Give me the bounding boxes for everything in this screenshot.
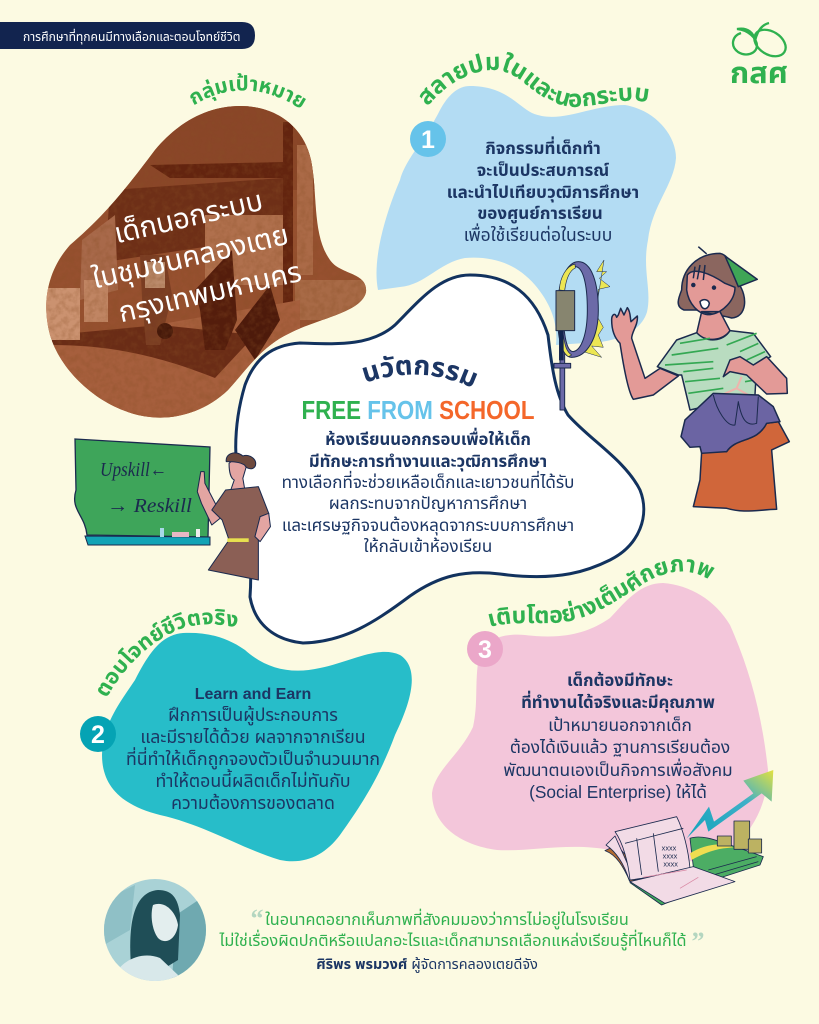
text: pink blob: (Social Enterprise) ให้ได้ [529,782,707,802]
illustration: growth arrow, money and book: xxxx [663,852,678,861]
illustration: growth arrow, money and book: xxxx [663,860,678,869]
holding arm [723,357,787,394]
text: blue blob: เพื่อใช้เรียนต่อในระบบ [464,223,612,245]
quote: ในอนาคตอยากเห็นภาพที่สังคมมองว่าการไม่อยู่ในโรงเรียน [265,908,629,929]
hair [678,253,745,318]
illustration: green chalkboard: → Reskill [107,495,192,517]
text: blue blob: ของศูนย์การเรียน [477,204,603,224]
badge 2 [80,716,116,752]
heading: panel 3: เติบโตอย่างเต็มศักยภาพ [488,559,715,626]
text: blue blob: กิจกรรมที่เด็กทำ [485,136,601,158]
neck and face [687,271,735,339]
illustration: ring light [554,260,610,410]
text: pink blob: เด็กต้องมีทักษะ [567,671,673,690]
panel: pink blob [432,583,768,862]
bandana [725,256,757,287]
illustration: green chalkboard: Upskill← [100,459,167,481]
portrait: shoulder [120,956,178,981]
quote: ศิริพร พรมวงศ์ ผู้จัดการคลองเตยดีจัง [316,957,538,973]
text: teal blob: ฝึกการเป็นผู้ประกอบการ [168,705,338,727]
text: central blob: และเศรษฐกิจจนต้องหลุดจากระบบการศึกษา [282,515,574,536]
illustration: growth arrow, money and book: xxxx [662,844,677,853]
text: teal blob: ความต้องการของตลาด [171,793,335,813]
photo: foliage [80,106,366,320]
panel: white central blob [236,275,644,643]
badge 3 [467,631,503,667]
text: blue blob: และนำไปเทียบวุฒิการศึกษา [447,183,639,203]
portrait: hair [130,890,180,968]
quote: ไม่ใช่เรื่องผิดปกติหรือแปลกอะไรและเด็กสามารถเลือกแหล่งเรียนรู้ที่ไหนก็ได้ [218,929,687,950]
orange shirt [693,422,789,511]
illustration: girl with clothes [612,247,789,511]
text: central blob: ผลกระทบจากปัญหาการศึกษา [329,494,527,513]
header bar: การศึกษาที่ทุกคนมีทางเลือกและตอบโจทย์ชีวิต [23,28,240,44]
coins [717,821,762,853]
hand on hip [255,513,270,542]
text: blue blob [447,136,639,245]
text: pink blob: พัฒนาตนเองเป็นกิจการเพื่อสังคม [503,758,733,780]
illustration: growth arrow, money and book [605,770,773,905]
text: central blob: มีทักษะการทำงานและวุฒิการศึกษา [309,452,547,471]
target group caption: กรุงเทพมหานคร [116,256,305,329]
quote: ” [692,927,704,956]
heading: target group: กลุ่มเป้าหมาย [190,73,306,108]
target group caption [80,180,305,333]
text: central blob: ห้องเรียนนอกกรอบเพื่อให้เด็ก [325,427,531,449]
target group caption: เด็กนอกระบบ [111,185,266,250]
text: teal blob: Learn and Earn [195,686,311,703]
text: central blob [282,427,574,556]
text: pink blob: เป้าหมายนอกจากเด็ก [548,715,692,735]
text: central blob: ทางเลือกที่จะช่วยเหลือเด็กและเยาวชนที่ได้รับ [282,470,574,492]
badge 1 [410,121,446,157]
target group caption: ในชุมชนคลองเตย [89,219,292,295]
heading: blue blob: สลายปมในและนอกระบบ [420,52,649,108]
logo [730,23,791,90]
quote [218,904,704,973]
waving arm [612,308,678,399]
belt [227,538,249,542]
striped shirt [657,331,771,410]
panel: teal blob [102,633,412,861]
text: pink blob: ที่ทำงานได้จริงและมีคุณภาพ [521,690,715,712]
banknotes [690,837,763,880]
badge 3: 3 [478,636,492,664]
text: central blob: ให้กลับเข้าห้องเรียน [364,536,492,556]
logo: กสศ [730,58,788,90]
quote: “ [250,904,264,933]
portrait: foliage [172,901,206,978]
heading: panel 2: ตอบโจทย์ชีวิตจริง [98,608,238,696]
portrait: face [152,904,178,941]
neck and face [229,460,246,490]
hanger [722,377,748,395]
heading: free from school: FREE FROM SCHOOL [302,395,535,425]
illustration: teacher [197,453,270,580]
arrow [687,770,773,838]
portrait [104,879,206,981]
book [605,845,645,882]
heading: innovation: นวัตกรรม [362,356,478,386]
text: blue blob: จะเป็นประสบการณ์ [477,161,609,180]
text: pink blob [503,671,733,802]
header bar [0,22,255,49]
text: teal blob: และมีรายได้ด้วย ผลจากจากเรียน [140,727,366,747]
fringe strokes [693,247,707,280]
mouth and eyes [692,283,715,309]
badge 2: 2 [91,721,105,749]
panel: target group photo blob [40,100,380,425]
purple shirt [681,393,780,453]
photo: texture [46,122,362,418]
hair [226,453,256,469]
panel: blue blob [377,86,676,345]
text: teal blob [126,686,380,813]
illustration: green chalkboard [75,439,210,545]
photo: ground [40,280,300,425]
photo: people and ball [140,250,280,360]
raised arm [197,472,222,525]
text: teal blob: ทำให้ตอนนี้ผลิตเด็กไม่ทันกับ [155,769,351,791]
uniform [208,487,269,580]
text: pink blob: ต้องได้เงินแล้ว ฐานการเรียนต้อง [510,737,730,757]
badge 1: 1 [421,126,435,154]
text: teal blob: ที่นี่ทำให้เด็กถูกจองตัวเป็นจำนวนมาก [126,747,380,771]
